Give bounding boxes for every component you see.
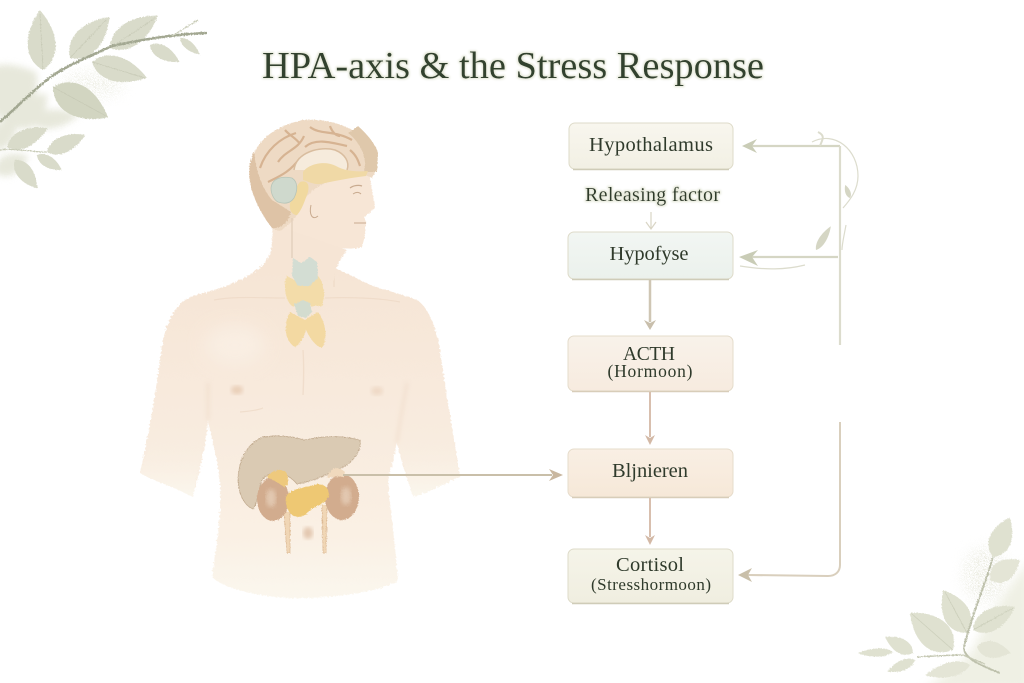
thyroid and adrenal lobes at the neck: [285, 257, 325, 348]
top-left botanical sprig: [0, 6, 207, 193]
box: Bijnieren: Bljnieren: [612, 460, 688, 482]
bottom-right botanical sprig: [858, 513, 1024, 683]
feedback line upper: [839, 146, 841, 345]
chest highlight: [205, 325, 265, 365]
feedback arrows with vine: [738, 132, 858, 582]
arrow: ACTH to Bijnieren: [645, 392, 655, 445]
box: Hypofyse: [568, 232, 733, 280]
ureters: [284, 505, 327, 553]
arrow: feedback to Hypothalamus: [742, 139, 840, 153]
right kidney: [325, 474, 359, 520]
left kidney: [257, 477, 289, 521]
arrow: feedback to Cortisol: [738, 422, 840, 582]
arrow: adrenal to Bijnieren: [343, 469, 563, 481]
box: Cortisol: Cortisol: [616, 554, 684, 576]
arrow: releasing factor to Hypofyse: [646, 212, 656, 229]
nipple left: [231, 386, 243, 394]
box: Cortisol: (Stresshormoon): [591, 575, 711, 594]
left adrenal: [267, 470, 288, 487]
vine decoration: [740, 132, 858, 269]
pituitary gland: [290, 181, 309, 215]
nipple right: [371, 386, 383, 396]
label: Releasing factor: Releasing factor: [585, 184, 720, 206]
right adrenal: [327, 468, 345, 478]
hypothalamus gland: [303, 163, 368, 184]
cerebellum: [271, 177, 297, 203]
box: Hypofyse: Hypofyse: [610, 243, 688, 265]
hair and brain: [249, 120, 378, 231]
body illustration: [140, 120, 460, 598]
head and face: [249, 120, 378, 285]
box: Hypothalamus: Hypothalamus: [589, 134, 713, 156]
corpus callosum arc: [294, 149, 348, 170]
liver: [238, 436, 360, 509]
box: Bijnieren: [568, 449, 733, 498]
face features: [310, 185, 366, 223]
arrow: Hypofyse to ACTH: [644, 280, 656, 330]
navel: [303, 527, 313, 539]
arrow: Bijnieren to Cortisol: [645, 498, 655, 545]
kidneys and adrenal glands: [257, 468, 359, 553]
brain folds: [260, 126, 360, 182]
box: ACTH: [568, 336, 733, 392]
box: ACTH: ACTH: [623, 344, 675, 365]
torso and arms: [140, 225, 460, 598]
body shading: [208, 272, 407, 443]
box: Cortisol: [568, 549, 733, 604]
nerve thread: [291, 218, 293, 258]
title: HPA-axis & the Stress Response: [262, 45, 764, 87]
arrow: feedback to Hypofyse: [739, 250, 838, 266]
box: Hypothalamus: [569, 123, 733, 170]
box: ACTH: (Hormoon): [608, 361, 693, 381]
adrenal cortex mass: [286, 484, 329, 517]
